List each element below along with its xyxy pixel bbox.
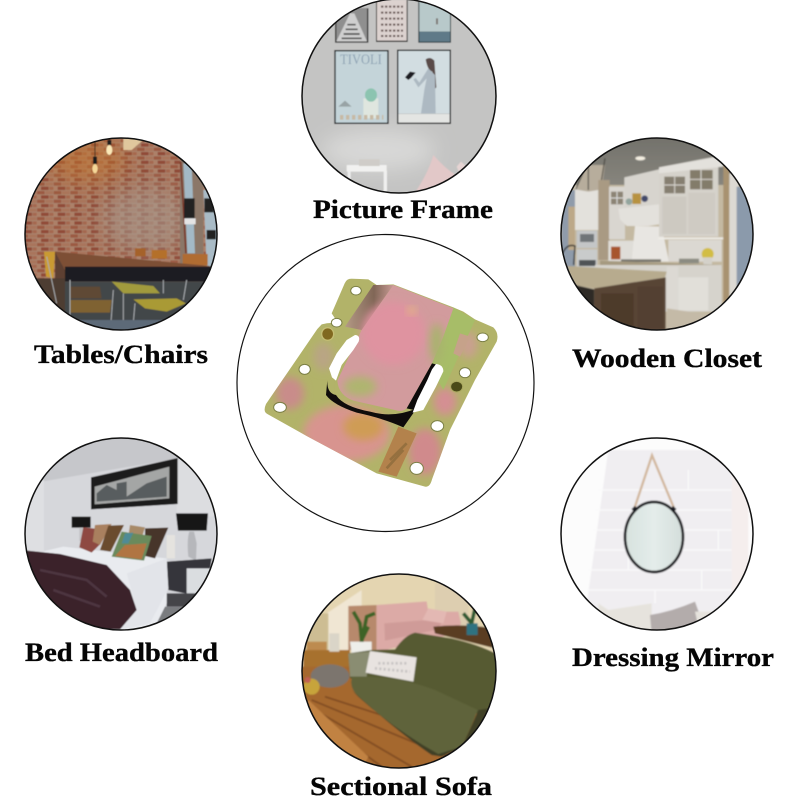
photo: brick wall dining room	[26, 138, 216, 330]
panel: bed headboard	[24, 437, 218, 662]
rivets	[322, 328, 463, 392]
photo: hanging round mirror	[588, 450, 748, 630]
panel: picture frame	[301, 0, 497, 218]
photo outline	[561, 138, 753, 330]
label: wooden closet: Wooden Closet	[572, 344, 762, 373]
product: metal sofa bracket	[264, 278, 498, 487]
panel: centre product	[237, 234, 534, 532]
photo outline	[25, 438, 217, 630]
panel: dressing mirror	[555, 430, 774, 672]
photo outline	[561, 438, 753, 630]
panel: tables and chairs	[24, 137, 218, 364]
panel: sectional sofa	[301, 573, 497, 796]
photo: gallery wall	[302, 0, 496, 192]
photo outline: product circle	[237, 234, 534, 532]
photo: gallery wall: TIVOLI	[340, 52, 382, 68]
photo: white kitchen cabinets	[562, 138, 752, 330]
label: tables and chairs: Tables/Chairs	[34, 340, 208, 369]
label: picture frame: Picture Frame	[313, 195, 493, 224]
photo: green sofa living room	[302, 574, 496, 768]
photo outline	[25, 138, 217, 330]
photo outline	[302, 574, 496, 768]
label: dressing mirror: Dressing Mirror	[572, 643, 774, 672]
photo outline	[302, 0, 496, 193]
holes	[274, 286, 488, 474]
panel: wooden closet	[555, 130, 762, 373]
slots	[329, 335, 443, 413]
label: bed headboard: Bed Headboard	[25, 638, 219, 667]
photo: bedroom	[26, 438, 216, 630]
